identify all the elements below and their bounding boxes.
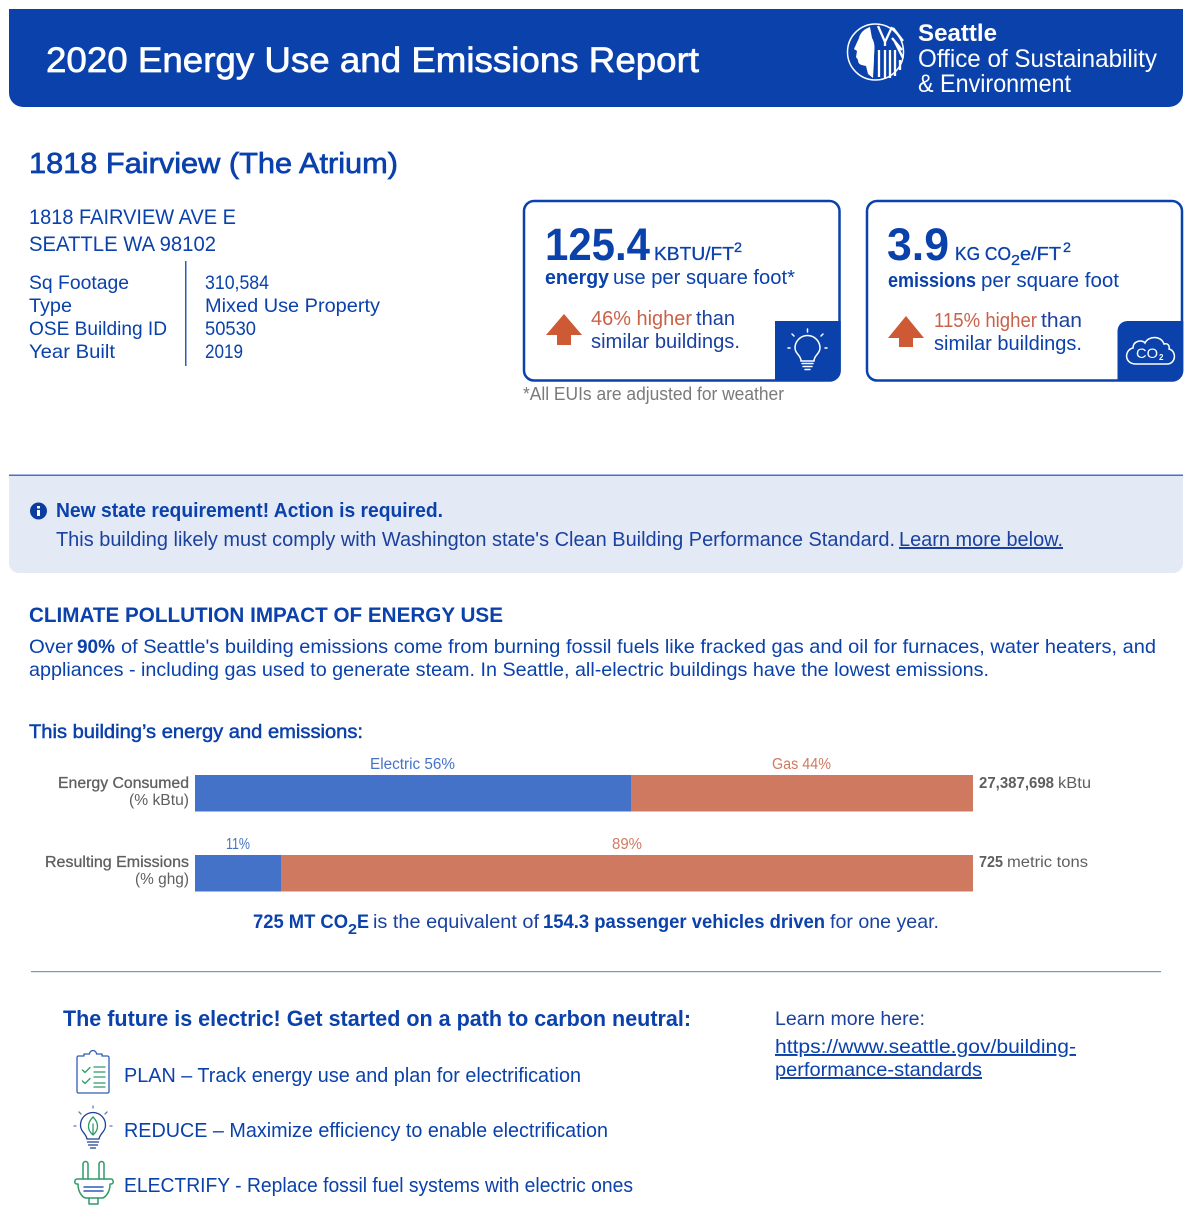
chart heading: This building’s energy and emissions: bbox=[29, 721, 363, 743]
building address bbox=[29, 206, 236, 256]
emissions comparison: than bbox=[1041, 310, 1082, 332]
Seattle logo: & Environment bbox=[918, 70, 1071, 98]
stacked bar chart: resulting emissions: Resulting Emissions bbox=[45, 854, 189, 871]
learn more link block bbox=[775, 1008, 1076, 1081]
emissions comparison: similar buildings. bbox=[934, 333, 1082, 355]
building facts table: 310,584 bbox=[205, 272, 269, 294]
emissions unit: KG CO bbox=[955, 243, 1011, 264]
icon: electrify plug bbox=[75, 1162, 113, 1204]
icon: reduce leaf bulb bbox=[74, 1106, 112, 1148]
stacked bar chart: energy consumed bbox=[58, 756, 1091, 812]
learn more link block: https://www.seattle.gov/building- bbox=[775, 1036, 1076, 1058]
Seattle logo: Office of Sustainability bbox=[918, 45, 1157, 73]
energy comparison: similar buildings. bbox=[591, 331, 740, 353]
icon: plan clipboard bbox=[77, 1051, 109, 1093]
section paragraph: Over bbox=[29, 636, 74, 658]
icon: info bbox=[30, 502, 47, 520]
building address: 1818 FAIRVIEW AVE E bbox=[29, 206, 236, 229]
vehicle equivalence caption: is the equivalent of bbox=[373, 911, 540, 933]
vehicle equivalence caption: for one year. bbox=[830, 911, 939, 933]
stacked bar chart: resulting emissions: 725 bbox=[979, 854, 1003, 871]
stacked bar chart: resulting emissions: 11% bbox=[226, 836, 250, 853]
building facts table: 50530 bbox=[205, 318, 256, 340]
emissions description: per square foot bbox=[981, 270, 1119, 292]
emissions unit: 2 bbox=[1063, 239, 1071, 255]
emissions unit: 2 bbox=[1011, 252, 1020, 269]
stacked bar chart: resulting emissions: (% ghg) bbox=[135, 871, 189, 888]
building facts table: Sq Footage bbox=[29, 272, 129, 294]
building facts table: Year Built bbox=[29, 341, 116, 363]
alert body: Learn more below. bbox=[899, 529, 1063, 551]
emissions comparison: 115% higher bbox=[934, 310, 1037, 332]
stacked bar chart: energy consumed: (% kBtu) bbox=[129, 792, 189, 809]
Seattle logo bbox=[848, 20, 1157, 98]
emissions value: 3.9 bbox=[887, 219, 949, 270]
Seattle logo: Seattle bbox=[918, 20, 997, 47]
electrify step: ELECTRIFY - Replace fossil fuel systems with electric ones bbox=[124, 1175, 633, 1197]
building name: 1818 Fairview (The Atrium) bbox=[29, 148, 398, 180]
icon: CO2 cloud bbox=[1118, 321, 1183, 381]
building facts table: Type bbox=[29, 295, 72, 317]
emissions unit bbox=[955, 239, 1071, 269]
icon: red up arrow bbox=[546, 314, 582, 345]
building facts table: 2019 bbox=[205, 341, 243, 363]
stacked bar chart: resulting emissions bbox=[45, 836, 1088, 892]
stacked bar chart: energy consumed: 27,387,698 bbox=[979, 775, 1054, 792]
icon: red up arrow bbox=[888, 316, 924, 347]
stacked bar chart: resulting emissions: 89% bbox=[612, 836, 642, 853]
energy comparison: 46% higher bbox=[591, 308, 692, 330]
building facts table: OSE Building ID bbox=[29, 318, 167, 340]
alert body: This building likely must comply with Washington state's Clean Building Performance Standard. bbox=[56, 529, 895, 551]
energy use value: 125.4 bbox=[545, 219, 650, 270]
reduce step: REDUCE – Maximize efficiency to enable electrification bbox=[124, 1120, 608, 1142]
panel: emissions card bbox=[867, 201, 1183, 381]
stacked bar chart: energy consumed: Electric 56% bbox=[370, 756, 455, 773]
vehicle equivalence caption bbox=[253, 911, 939, 938]
icon: light bulb bbox=[775, 321, 841, 381]
stacked bar chart: energy consumed: kBtu bbox=[1058, 775, 1091, 792]
vehicle equivalence caption: 154.3 passenger vehicles driven bbox=[543, 911, 825, 933]
energy comparison bbox=[591, 308, 740, 353]
icon: CO2 cloud: 2 bbox=[1159, 353, 1164, 362]
stacked bar chart: resulting emissions: metric tons bbox=[1007, 854, 1088, 871]
stacked bar chart: energy consumed: Gas 44% bbox=[772, 756, 831, 773]
vehicle equivalence caption: E bbox=[357, 911, 369, 933]
section paragraph: 90% bbox=[77, 636, 115, 658]
emissions description: emissions bbox=[888, 270, 976, 292]
icon: CO2 cloud: CO bbox=[1136, 345, 1158, 361]
section heading: CLIMATE POLLUTION IMPACT OF ENERGY USE bbox=[29, 603, 503, 627]
section paragraph: appliances - including gas used to generate steam. In Seattle, all-electric buildings have the lowest emissions. bbox=[29, 659, 989, 681]
building facts table bbox=[29, 261, 380, 366]
energy unit: KBTU/FT bbox=[654, 243, 734, 264]
report title: 2020 Energy Use and Emissions Report bbox=[46, 40, 699, 80]
section paragraph bbox=[29, 636, 1156, 681]
vehicle equivalence caption: 725 MT CO bbox=[253, 911, 348, 933]
learn more link block: performance-standards bbox=[775, 1059, 982, 1081]
energy unit: 2 bbox=[734, 239, 742, 255]
building facts table: Mixed Use Property bbox=[205, 295, 380, 317]
energy comparison: than bbox=[696, 308, 735, 330]
section paragraph: of Seattle's building emissions come from burning fossil fuels like fracked gas and oil for furnaces, water heaters, and bbox=[121, 636, 1156, 658]
alert heading: New state requirement! Action is required. bbox=[56, 500, 443, 522]
building address: SEATTLE WA 98102 bbox=[29, 233, 216, 256]
learn more link block: Learn more here: bbox=[775, 1008, 925, 1030]
energy description: energy bbox=[545, 267, 610, 289]
call to action heading: The future is electric! Get started on a path to carbon neutral: bbox=[63, 1006, 691, 1031]
panel: energy use card bbox=[524, 201, 841, 381]
panel: state requirement alert bbox=[9, 474, 1183, 573]
footnote: *All EUIs are adjusted for weather bbox=[523, 384, 784, 404]
vehicle equivalence caption: 2 bbox=[348, 921, 357, 938]
header banner bbox=[9, 9, 1183, 107]
stacked bar chart: energy consumed: Energy Consumed bbox=[58, 775, 189, 792]
emissions comparison bbox=[934, 310, 1082, 355]
plan step: PLAN – Track energy use and plan for electrification bbox=[124, 1065, 581, 1087]
emissions description bbox=[888, 270, 1119, 292]
energy description: use per square foot* bbox=[613, 267, 795, 289]
emissions unit: e/FT bbox=[1020, 243, 1061, 264]
